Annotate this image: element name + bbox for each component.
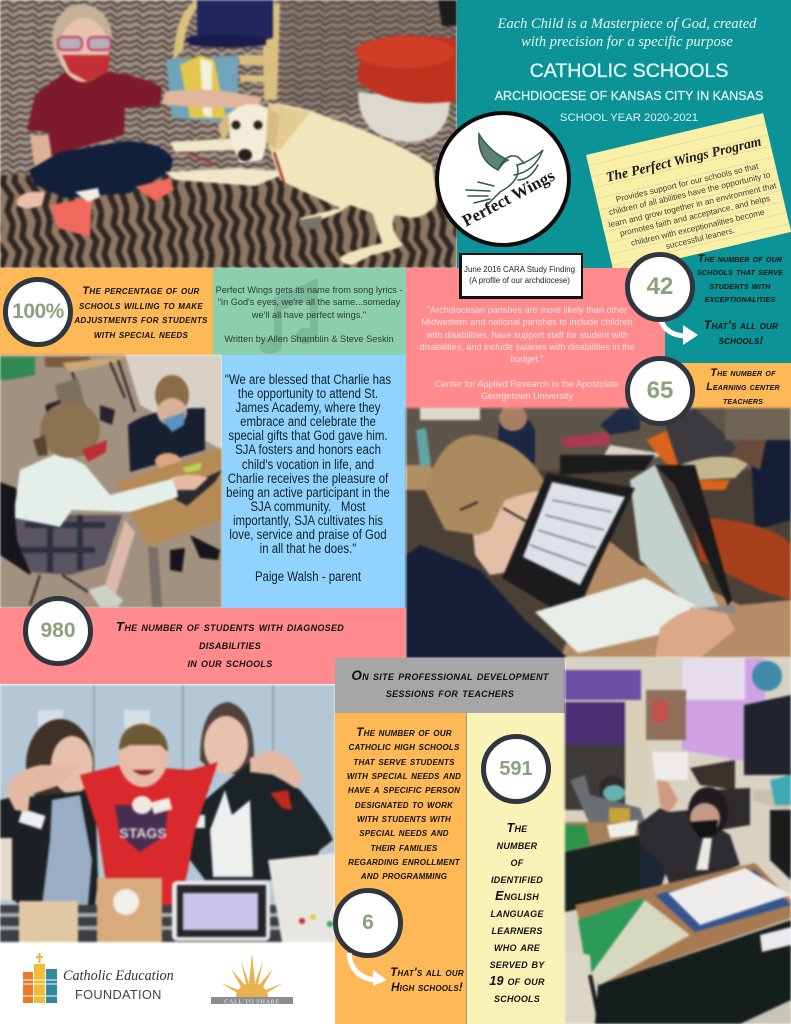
text: parent quote: James Academy, where they [236,400,380,415]
text: teachers caption: The number of [710,367,776,379]
text: all our schools: That's all our [704,318,778,332]
text: 100 percent caption: schools willing to make [79,300,203,312]
text: 42 schools caption [697,253,783,305]
icon: music note [260,278,318,354]
text: song lyrics: we'll all have perfect wings." [252,310,366,320]
icon: Perfect Wings logo: Perfect Wings [459,166,558,230]
text: 980 caption [116,619,344,670]
panel: perfect wings note card [586,113,791,274]
icon: Perfect Wings logo [435,111,571,247]
text: 980 caption: The number of students with diagnosed [116,619,344,634]
panel: teal header [457,0,791,363]
text: 42 schools caption: students with [709,280,771,292]
text: parent quote [225,372,391,584]
text: high schools caption: and programming [361,869,447,882]
stat circle: 6: 6 [362,911,374,934]
dog [165,103,436,265]
panel: song lyrics [213,268,406,355]
young man in red shirt [5,723,302,910]
stat circle: 42 [625,252,695,322]
text: song lyrics: "in God's eyes, we're all the same...someday [218,297,400,307]
text: learners caption: learners [491,923,543,937]
text: teachers caption [706,367,780,407]
text: all our high schools: High schools! [391,980,463,994]
arrow: 42 to all our schools [658,322,698,345]
logo: Call to Share [211,954,293,1005]
text: high schools caption: designated to work [355,798,453,811]
stat circle: 100 percent [3,277,73,347]
stat circle: 6 [333,888,403,958]
text: CARA quote: Georgetown University [481,391,573,401]
text: 42 schools caption: schools that serve [697,266,783,278]
text: high schools caption: have a specific person [348,783,460,796]
text: parent quote: Paige Walsh - parent [255,569,361,584]
note body: successful leaners. [665,225,736,251]
text: Catholic Education: Catholic Education [63,968,174,984]
stat circle: 100 percent: 100% [12,300,64,323]
note body [607,161,777,251]
text: parent quote: SJA fosters and honors each [235,442,381,457]
text: 100 percent caption: The percentage of our [82,285,200,297]
text: high schools caption: regarding enrollment [348,855,460,868]
text: CARA quote: budget." [510,354,544,364]
text: parent quote: the opportunity to attend St. [238,386,378,401]
note body: learn and grow together in an environment that [607,180,777,229]
text: high schools caption [347,726,461,882]
text: learners caption: served by [490,957,544,971]
text: teachers caption: Learning center [706,381,780,393]
note body: children of all abilities have the opportunity to [608,170,771,218]
panel: 100 percent [0,268,213,355]
panel: 980 students [0,608,406,684]
stat circle: 980 [23,596,93,666]
text: CARA quote [419,305,635,401]
card shop table [0,838,335,942]
stat circle: 980: 980 [40,619,76,642]
stat circle: 65: 65 [647,377,673,404]
text: 980 caption: disabilities [199,637,261,652]
text: 100 percent caption [74,285,208,340]
woman right [187,702,333,880]
text: CARA study box: June 2016 CARA Study Finding [464,265,575,274]
text: professional development caption: On site professional development [351,668,549,683]
text: all our high schools: That's all our [390,966,464,979]
text: learners caption: English [495,889,539,903]
text: parent quote: in all that he does." [260,541,356,556]
text: parent quote: special gifts that God gave him. [228,428,388,443]
text: learners caption: language [490,906,544,920]
text: high schools caption: special needs and [359,826,449,839]
header: script tagline: with precision for a specific purpose [521,34,733,50]
text: 980 caption: in our schools [187,655,273,670]
text: song lyrics [216,285,402,344]
text: CARA study box: (A profile of our archdiocese) [469,276,570,285]
woman left [0,719,98,905]
photo: classroom students raising hands [563,656,791,1024]
text: all our high schools [390,966,464,994]
text: parent quote: SJA community. Most [250,499,366,514]
boy with glasses [406,435,568,658]
icon: books and cross [23,953,57,1003]
text: Foundation: FOUNDATION [75,987,162,1002]
text: 100 percent caption: adjustments for students [74,314,208,326]
stat circle: 65 [625,356,695,426]
magnifier tablet [502,473,635,620]
text: high schools caption: with students with [357,812,451,825]
note body: children with exceptionalities become [630,206,765,248]
text: parent quote: being an active participant in the [226,485,390,500]
text: parent quote: importantly, SJA cultivates his [233,513,383,528]
text: song lyrics: Perfect Wings gets its name from song lyrics - [216,285,402,295]
text: CARA study box [459,253,583,299]
arrow: 6 to all our high schools [346,952,387,986]
girl raising hand [638,780,740,885]
panel: 591 learners [466,713,565,1024]
text: CARA quote: Midwestern and national parishes to include children [421,317,633,327]
text: professional development caption [351,668,549,700]
text: CARA quote: Center for Applied Research in the Apostolate [435,379,619,389]
front desk with folders [565,863,791,1024]
text: parent quote: embrace and celebrate the [240,414,376,429]
text: 42 schools caption: The number of our [698,253,782,265]
text: high schools caption: their families [371,841,437,854]
logo: Catholic Education Foundation [23,953,174,1003]
young man in red shirt: STAGS [119,825,167,841]
text: all our schools [704,318,778,346]
text: 42 schools caption: exceptionalities [705,293,775,305]
text: CARA quote: disabilities, and include salaries with disabilities in the [419,342,635,352]
text: 100 percent caption: with special needs [94,328,188,340]
text: parent quote: Charlie receives the pleasure of [228,471,388,486]
text: parent quote: "We are blessed that Charlie has [225,372,391,387]
stat circle: 591: 591 [499,758,533,780]
student in white sweater [0,402,208,607]
title: CATHOLIC SCHOOLS [530,60,728,82]
header: script tagline: Each Child is a Masterpiece of God, created [498,16,756,32]
text: high schools caption: with special needs and [347,769,461,782]
text: learners caption: The [507,821,527,835]
text: learners caption: who are [494,940,540,954]
panel: parent quote [222,355,406,608]
text: high schools caption: The number of our [356,726,452,739]
subtitle: ARCHDIOCESE OF KANSAS CITY IN KANSAS [495,89,763,103]
boy at table [128,375,220,572]
text: learners caption: identified [491,872,543,886]
text: CARA quote: with disabilities, have support staff for student with [426,330,628,340]
panel: 65 teachers [665,363,791,409]
text: parent quote: love, service and praise of God [229,527,387,542]
text: learners caption: 19 of our [489,974,545,988]
header: script tagline [497,16,756,50]
stat circle: 42: 42 [647,273,673,300]
text: learners caption: number [497,838,537,852]
note body: promotes faith and acceptance, and helps [619,193,771,238]
girl [17,4,262,237]
text: parent quote: child's vocation in life, and [242,457,374,472]
note heading: The Perfect Wings Program [604,134,763,185]
panel: professional development [335,658,565,713]
text: teachers caption: teachers [723,395,763,407]
text: high schools caption: catholic high schools [348,740,460,753]
note body: Provides support for our schools so that [615,161,759,204]
panel: CARA finding [406,268,665,409]
text: learners caption: of [511,855,523,869]
text: learners caption [489,821,545,1005]
photo: student with blue-masked classmate at laptop [0,354,222,608]
photo: boy reading on magnifier tablet [404,406,791,660]
text: high schools caption: that serve students [353,755,455,768]
text: learners caption: schools [494,991,540,1005]
text: professional development caption: sessions for teachers [386,685,514,700]
text: song lyrics: Written by Allen Shamblin & Steve Seskin [224,334,394,344]
text: all our schools: schools! [719,334,763,346]
text: CARA quote: "Archdiocesan parishes are more likely than other [427,305,627,315]
photo: girl with service dog on carpet [0,0,457,268]
panel: 6 high schools [335,713,466,1024]
photo: three smiling people at card shop table [0,684,335,944]
stat circle: 591 [481,734,551,804]
school year: SCHOOL YEAR 2020-2021 [560,112,698,124]
